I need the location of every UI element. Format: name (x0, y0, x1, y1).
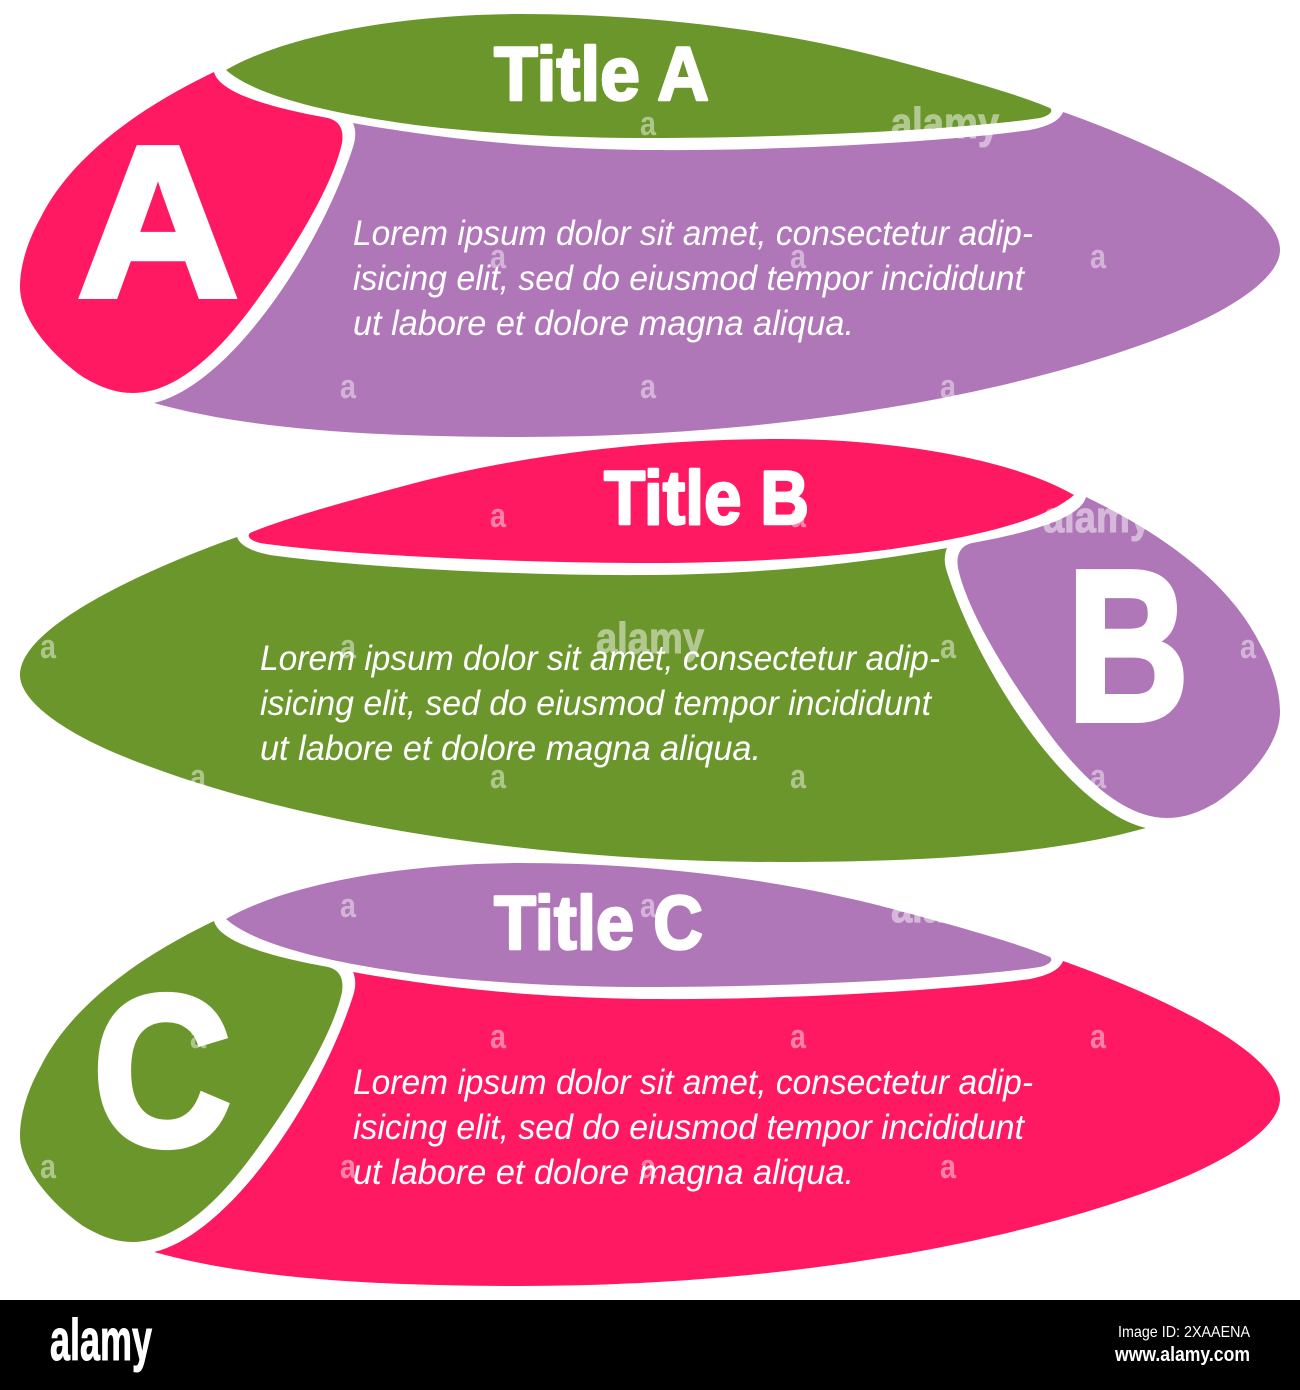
watermarks: a (190, 1018, 207, 1056)
body text A: Lorem ipsum dolor sit amet, consectetur adip- (353, 214, 1033, 253)
watermarks: a (1090, 1018, 1107, 1056)
panel: block A (20, 14, 1280, 437)
panel A letter badge shape (20, 72, 342, 393)
watermarks (40, 99, 1257, 1186)
panel C title shape (226, 863, 1051, 987)
watermarks: a (40, 628, 57, 666)
body text A (353, 214, 1033, 343)
watermarks: a (640, 368, 657, 406)
panel A body shape (154, 112, 1280, 437)
title B: Title B (604, 456, 809, 541)
footer bar (0, 1300, 1300, 1390)
watermarks: alamy (891, 99, 999, 148)
watermarks: a (790, 758, 807, 796)
watermarks: a (640, 1148, 657, 1186)
watermarks: a (790, 238, 807, 276)
watermarks: a (940, 1148, 957, 1186)
footer logo: alamy (50, 1308, 152, 1373)
panel B body shape (20, 537, 1146, 862)
title A: Title A (494, 32, 709, 117)
watermarks: a (490, 758, 507, 796)
watermarks: a (940, 368, 957, 406)
panel C letter badge shape (20, 921, 342, 1242)
watermarks: a (340, 887, 357, 925)
panel: block C (20, 863, 1280, 1286)
body text C: Lorem ipsum dolor sit amet, consectetur adip- (353, 1063, 1033, 1102)
website: www.alamy.com (1114, 1344, 1250, 1366)
watermarks: a (940, 628, 957, 666)
watermarks: a (340, 1148, 357, 1186)
panel C body shape (154, 961, 1280, 1286)
watermarks: a (790, 1018, 807, 1056)
watermarks: a (340, 628, 357, 666)
body text B: isicing elit, sed do eiusmod tempor incididunt (260, 684, 932, 723)
watermarks: a (790, 497, 807, 535)
watermarks: a (490, 238, 507, 276)
watermarks: a (1090, 758, 1107, 796)
watermarks: a (490, 1018, 507, 1056)
letter B: B (1067, 525, 1189, 766)
watermarks: a (640, 887, 657, 925)
body text A: isicing elit, sed do eiusmod tempor incididunt (353, 259, 1025, 298)
watermarks: a (1240, 628, 1257, 666)
panel A title shape (226, 14, 1051, 138)
watermarks: a (340, 368, 357, 406)
panel B title shape (249, 439, 1074, 563)
image id: Image ID: 2XAAENA (1118, 1324, 1250, 1341)
watermarks: a (40, 1148, 57, 1186)
body text B (260, 639, 940, 768)
body text B: ut labore et dolore magna aliqua. (260, 729, 761, 768)
title C: Title C (494, 881, 703, 966)
body text C: isicing elit, sed do eiusmod tempor incididunt (353, 1108, 1025, 1147)
watermarks: alamy (1043, 493, 1151, 542)
body text C (353, 1063, 1033, 1192)
panel B letter badge shape (958, 497, 1280, 818)
watermarks: a (1090, 238, 1107, 276)
panel: block B (20, 439, 1280, 862)
watermarks: a (640, 105, 657, 143)
body text C: ut labore et dolore magna aliqua. (353, 1153, 854, 1192)
watermarks: alamy (596, 614, 704, 663)
body text B: Lorem ipsum dolor sit amet, consectetur adip- (260, 639, 940, 678)
watermarks: a (490, 497, 507, 535)
watermarks: a (190, 758, 207, 796)
letter A: A (77, 101, 239, 342)
body text A: ut labore et dolore magna aliqua. (353, 304, 854, 343)
watermarks: alamy (891, 883, 999, 932)
letter C: C (93, 950, 232, 1191)
